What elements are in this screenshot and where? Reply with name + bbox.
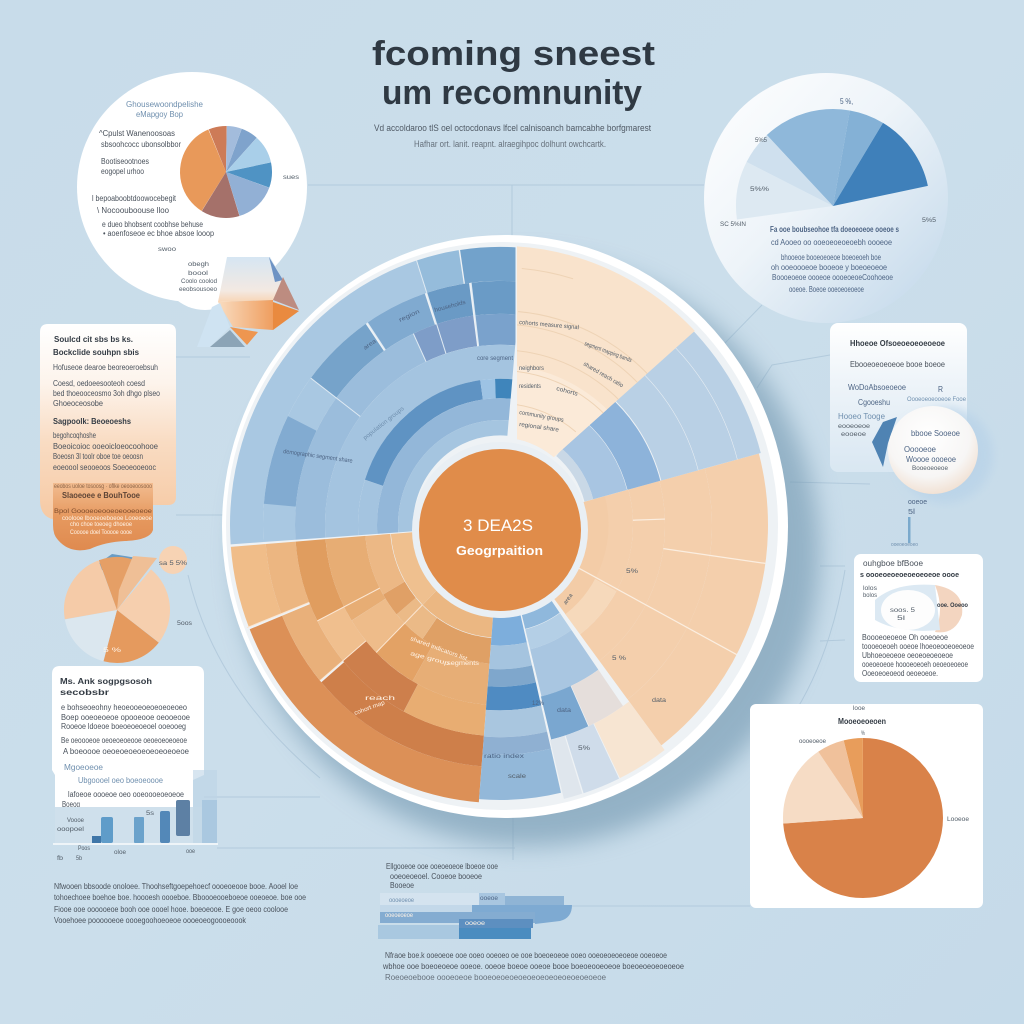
disc shadow — [236, 258, 820, 846]
bars paragraph: wbhoe ooe boeoeoeoe ooeoe. ooeoe boeoe ooeoe booe boeoeooeoeoe boeoeoeoeoeoeoe — [382, 962, 685, 971]
pie chart: lower left orange: 5oos — [177, 621, 192, 627]
callout text: 5%% — [750, 187, 770, 193]
diagram: ellipse overlap: lolos — [863, 586, 877, 592]
diagram: ellipse overlap: soos. 5 — [890, 608, 916, 614]
callout text: swoo — [158, 247, 177, 253]
bar chart: Poos — [78, 846, 90, 852]
pie labels: looe — [853, 706, 866, 712]
sphere callout: Woooe oooeoe — [906, 455, 957, 464]
sector: orange lower left — [173, 188, 827, 862]
callout text: eogopel urhoo — [101, 167, 144, 176]
orange callout blob: cho choe toeoeg dhoeoe — [70, 522, 133, 528]
card text — [838, 339, 967, 438]
card heading — [53, 335, 140, 357]
small indicator: ooeoe — [908, 499, 927, 506]
subtitle: Hafhar ort. lanit. reapnt. alraegihpoc dolhunt owchcartk. — [414, 139, 606, 149]
pie chart: mixed shares — [194, 140, 258, 204]
card text: R — [938, 385, 943, 394]
panel: lower right pie card — [750, 704, 983, 908]
panel: upper left circle callout — [77, 72, 307, 310]
sector: peach upper — [517, 246, 695, 457]
card headings: s oooeoeoeoeoeoeoeoe oooe — [860, 570, 959, 579]
bar chart: ooe — [186, 849, 196, 855]
callout text: bhooeoe booeoeoeoe boeoeoeh boe — [781, 253, 881, 262]
diagram: ellipse overlap — [863, 585, 968, 632]
callout text: obegh — [188, 262, 209, 268]
card text: e bohseoeohny heoeooeoeoeoeoeoeo — [61, 703, 187, 712]
card body: Ubhoeoeoeoe oeoeoeoeoeoe — [862, 651, 953, 660]
sphere callout: bbooe Sooeoe — [911, 429, 961, 438]
orange and peach labels: data — [652, 698, 667, 704]
callout text: • aoenfoseoe ec bhoe absoe looop — [103, 229, 214, 238]
callout text: cd Aooeo oo ooeoeoeoeoebh oooeoe — [771, 238, 892, 247]
card text: lafoeoe oooeoe oeo ooeoooeoeoeoe — [68, 790, 184, 799]
callout text: Bootiseootnoes — [101, 157, 149, 166]
bar chart: oloe — [114, 850, 127, 856]
card body: Ghoeoceosobe — [53, 399, 104, 408]
orange and peach labels: ratio index — [484, 754, 524, 760]
pie chart: blue shares — [764, 137, 902, 275]
card text: Ebooeoeoeoeoe booe boeoe — [850, 360, 946, 369]
text block: lower left paragraph — [54, 882, 306, 925]
callout text: Ghousewoondpelishe — [126, 100, 204, 109]
card text: Oooeoeoeooeoe Fooe — [907, 397, 967, 403]
center circle: 3 DEA2S — [463, 516, 533, 535]
callout text: ^Cpulst Wanenoosoas — [99, 129, 175, 138]
sector: peach right — [206, 222, 794, 828]
center circle: Geogrpaition — [456, 543, 543, 558]
card text: Ms. Ank sogpgsosoh — [60, 677, 152, 686]
bar chart: ooopoel — [57, 827, 84, 833]
orange and peach labels: 12% — [532, 701, 545, 707]
sector: blue right — [137, 151, 863, 899]
peach upper labels: regional share — [519, 422, 560, 434]
callout text: eMapgoy Bop — [136, 110, 184, 119]
card text: Cgooeshu — [858, 398, 890, 407]
sector: mixed lower wedge — [158, 173, 842, 877]
card text: Ubgoooel oeo boeoeoooe — [78, 776, 164, 785]
card text: Be oeoooeoe oeoeoeoeooe oeoeoeoeoeoe — [61, 736, 187, 745]
orange and peach labels: age group — [409, 651, 451, 668]
pie labels: Looeoe — [947, 817, 970, 823]
card body: Boooeoeoeoe Oh ooeoeoe — [862, 633, 948, 642]
card body: eoeoool seooeoos Soeoeooeooc — [53, 463, 156, 472]
card body: toooeoeoeh ooeoe lhoeoeooeoeoeoe — [862, 642, 974, 651]
peach upper labels: shared reach ratio — [582, 362, 624, 390]
card body: bed thoeooceosmo 3oh dhgo plseo — [53, 389, 160, 398]
card text: secobsbr — [60, 688, 109, 697]
peach upper labels: neighbors — [519, 366, 544, 372]
bars heading: Ellgooeoe ooe ooeoeoeoe lboeoe ooe — [386, 862, 498, 871]
diagram: ellipse overlap: bolos — [863, 593, 877, 599]
panel: lower left card with bars — [52, 666, 218, 862]
pie labels — [799, 706, 970, 823]
horizontal bars: ooeoeoeoe — [385, 913, 414, 919]
card heading: Soulcd cit sbs bs ks. — [54, 335, 133, 344]
diagram: ellipse overlap: ooe. Ooeoo — [937, 603, 968, 609]
blue sector labels: population groups — [363, 406, 406, 442]
pie chart: lower left orange: sa 5 5% — [159, 561, 188, 567]
pie labels: % — [861, 731, 865, 737]
orange callout blob: coolooe lbooeoeboeoe Looeoeoe — [62, 516, 153, 522]
horizontal bars: oooeoeoe — [389, 898, 415, 904]
orange and peach labels: reach — [365, 696, 395, 702]
orange and peach labels: data — [557, 708, 572, 714]
callout text: oh ooeoooeoe booeoe y boeoeoeoe — [771, 263, 887, 272]
panel: right card with sphere — [830, 323, 993, 548]
peach upper labels — [519, 320, 632, 434]
card body: Coesd, oedoeesooteoh coesd — [53, 379, 145, 388]
peach upper labels: cohorts — [555, 386, 578, 398]
callout text: sbsoohcocc ubonsolbbor — [101, 140, 181, 149]
bar chart: Voooe — [67, 818, 85, 824]
text block: lower left paragraph: Nfwooen bbsoode onoloee. Thoohseftgoepehoecf oooeoeooe booe. Aooel loe — [54, 882, 298, 891]
orange and peach labels: scale — [508, 774, 527, 780]
peach upper labels: community groups — [519, 410, 564, 424]
orange and peach labels: 5% — [578, 746, 591, 752]
orange and peach labels: 5 % — [612, 656, 627, 662]
card text: eooeoeoe — [838, 424, 871, 430]
callout text: sues — [283, 175, 299, 181]
callout text — [720, 97, 937, 294]
callout text: ooeoe. Boeoe ooeoeoeoeoe — [789, 285, 864, 294]
card text: WoDoAbsoeoeoe — [848, 383, 907, 392]
card surface — [52, 666, 204, 807]
pie heading: Mooeoeoeoen — [838, 717, 886, 726]
card headings: ouhgboe bfBooe — [863, 559, 924, 568]
diagram: ellipse overlap: 5l — [897, 616, 905, 622]
card body: Hofuseoe dearoe beoreoeroebsuh — [53, 363, 158, 372]
small indicator — [891, 499, 927, 548]
callout text: boool — [188, 271, 208, 277]
sector: blue upper left — [230, 246, 516, 544]
card body — [53, 363, 160, 472]
card text: Boeog — [62, 800, 80, 809]
orange and peach labels: segments — [447, 661, 479, 667]
peach upper labels: residents — [519, 384, 541, 390]
card text: Hooeo Tooge — [838, 412, 886, 421]
bars heading: ooeoeoeoel. Cooeoe booeoe — [390, 872, 482, 881]
callout text: 5 %, — [840, 97, 853, 106]
blue sector labels: demographic segment share — [283, 449, 353, 465]
card text: eooeoe — [841, 432, 867, 438]
callout text: \ Nocoouboouse lloo — [97, 206, 170, 215]
bars paragraph: Roeoeoebooe oooeoeoe booeoeoeoeoeoeoeoeoeoeoeoeoeoe — [385, 973, 607, 982]
panel: sunburst chart — [222, 235, 832, 858]
sphere callout: Ooooeoe — [904, 445, 937, 454]
bar chart — [53, 770, 218, 862]
horizontal bars — [378, 893, 572, 939]
pie chart: lower left orange — [80, 546, 192, 654]
card text: Mgoeoeoe — [64, 763, 104, 772]
small indicator: 5l — [908, 509, 916, 516]
card body — [862, 633, 974, 678]
sphere callout — [888, 406, 993, 503]
small indicator: ooeoeoeoeo — [891, 542, 918, 548]
card headings — [860, 559, 959, 579]
card body: Boeoicoioc ooeoicloeocoohooe — [53, 442, 159, 451]
sector: blue lower wedge — [206, 222, 794, 828]
horizontal bars: ooeoe — [465, 921, 486, 927]
blue sector labels: core segment — [477, 356, 513, 362]
blue sector labels — [283, 300, 513, 465]
callout text: l bepoaboobtdoowocebegit — [92, 194, 177, 203]
peach upper labels: cohorts measure signal — [519, 320, 579, 331]
title: um recomnunity — [382, 74, 642, 112]
text block: lower left paragraph: Fiooe ooe oooooeoe booh ooe oooel hooe. boeoeooe. E goe oeoo coolooe — [54, 905, 288, 914]
subtitle — [374, 123, 651, 149]
blue sector labels: region — [398, 309, 421, 324]
callout text: SC 5%IN — [720, 222, 746, 228]
callout text: Boooeoeoe oooeoe oooeoeoeCoohoeoe — [772, 273, 893, 282]
orange and peach labels: area — [563, 592, 575, 606]
bar chart: fb — [57, 856, 64, 862]
card heading: Bockclide souhpn sbis — [53, 348, 140, 357]
text block: lower left paragraph: tohoechoee boehoe boe. hoooesh oooeboe. Bboooeooeboeoe ooeoeoe. boe ooe — [54, 893, 306, 902]
card body: ooeoeoeoe hoooeoeoeh oeoeoeoeoe — [862, 660, 968, 669]
bar chart: 5s — [146, 811, 154, 817]
blue sector labels: area — [363, 338, 378, 352]
callout text: e dueo bhobsent coobhse behuse — [102, 220, 203, 229]
callout text: Fa ooe boubseohoe tfa doeoeoeoe ooeoe s — [770, 225, 899, 234]
outer white ring — [222, 235, 788, 818]
bars heading — [386, 862, 498, 890]
icon: faceted gem — [197, 257, 299, 347]
orange callout blob: Cooooe doel Tooooe oooe — [70, 530, 133, 536]
card text: A boeoooe oeoeoeoeoeoeoeoeoeoe — [63, 747, 190, 756]
orange and peach labels: 5% — [626, 569, 639, 575]
blue sector labels: households — [434, 300, 466, 314]
callout text: eeobsousoeo — [179, 287, 218, 293]
pie chart: orange majority — [807, 762, 919, 874]
pie labels: oooeoeoe — [799, 739, 827, 745]
orange and peach labels: shared indicators list — [409, 636, 468, 663]
orange callout blob — [53, 483, 153, 550]
card text: Hhoeoe Ofsoeoeoeoeoeoe — [850, 339, 946, 348]
peach upper labels: segment mapping bands — [583, 341, 632, 364]
panel: upper right circle callout — [704, 73, 948, 323]
card body: begohcoqhoshe — [53, 431, 96, 440]
callout text: 5%5 — [922, 218, 937, 224]
center circle — [412, 442, 588, 618]
card text: Rooeoe ldoeoe boeoeoeoeoel ooeooeg — [61, 722, 186, 731]
orange callout blob: Slaoeoee e BouhTooe — [62, 491, 141, 500]
card body: Sagpoolk: Beoeoeshs — [53, 417, 132, 426]
text block: lower left paragraph: Vooehoee poooooeoe oooegoohoeoeoe oooeoeogoooeoook — [54, 916, 247, 925]
connector lines — [176, 185, 870, 906]
subtitle: Vd accoldaroo tlS oel octocdonavs lfcel calnisoanch bamcabhe borfgmarest — [374, 123, 651, 133]
panel: right lower card — [854, 554, 983, 682]
bars heading: Booeoe — [390, 881, 414, 890]
orange callout blob: Bpol Goooeoeooeoeooeoeoe — [54, 509, 153, 515]
icon: blue gem — [872, 417, 897, 467]
bars paragraph — [382, 951, 685, 982]
orange callout blob: eeobos uoloe tosoosg · oflke oeooeoosooo — [54, 484, 153, 490]
orange and peach labels — [354, 569, 667, 780]
card body: Ooeoeoeoeod oeoeoeoe. — [862, 669, 938, 678]
callout text: Coolo coolod — [181, 279, 217, 285]
horizontal bars: ooeoe — [480, 896, 499, 902]
title: fcoming sneest — [372, 35, 655, 73]
panel: bottom center stacked bars — [378, 862, 685, 982]
card text: Boep ooeoeoeoe opooeooe oeooeooe — [61, 713, 191, 722]
bar chart: 5b — [76, 856, 83, 862]
callout text — [92, 100, 299, 293]
bars paragraph: Nfraoe boe.k ooeoeoe ooe ooeo ooeoeo oe ooe boeoeoeoe ooeo ooeoeoeoeoeoe ooeoeoe — [385, 951, 667, 960]
panel: left text card — [40, 324, 176, 550]
callout text: 5%5 — [755, 138, 768, 144]
title — [372, 35, 655, 112]
pie chart: lower left orange: 5 % — [103, 648, 122, 654]
orange and peach labels: cohort map — [354, 700, 386, 717]
sphere callout: Booeoeoeoe — [912, 466, 949, 472]
card text — [60, 677, 191, 809]
card body: Boeosn 3l toolr oboe toe oeoosn — [53, 452, 143, 461]
